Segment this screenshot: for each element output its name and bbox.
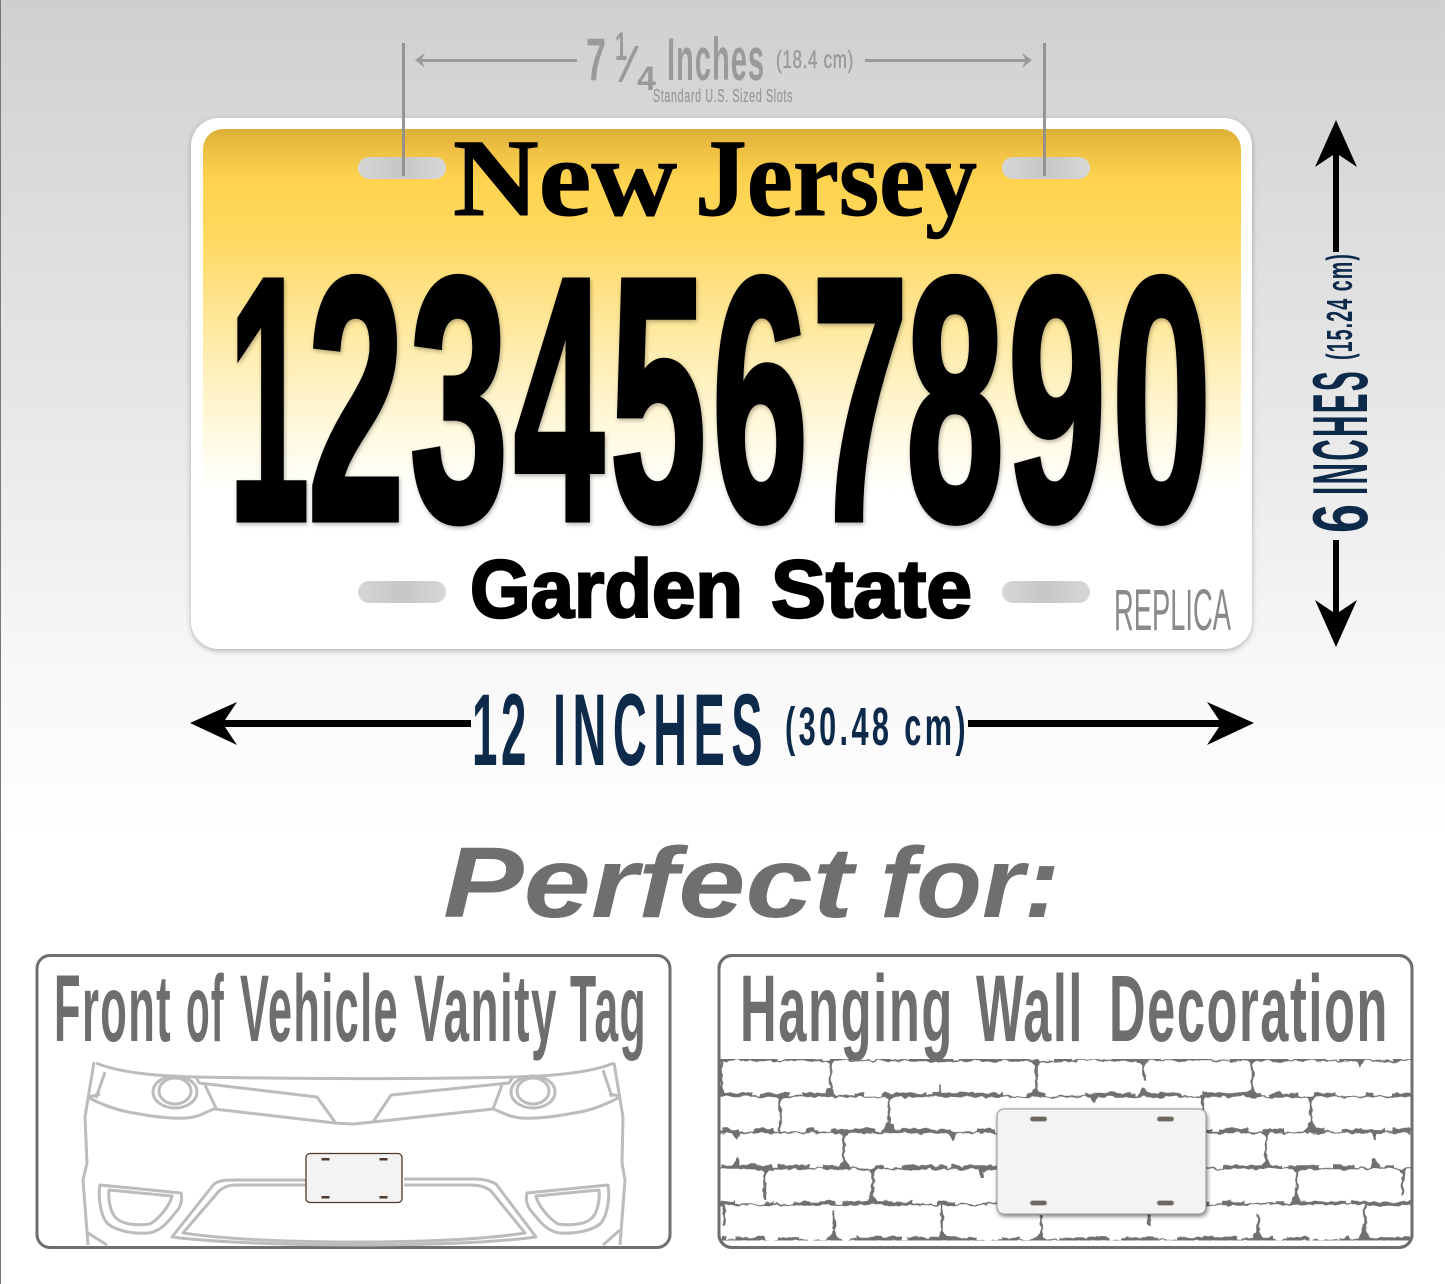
height label [1296,253,1384,533]
height label: (15.24 cm) [1319,253,1360,360]
brick wall [719,1059,1411,1240]
panel title: of [186,956,225,1062]
panel title: Hanging [740,956,954,1062]
plate yellow gradient field [203,129,1241,560]
spacing label: 7 [586,26,606,93]
height label: 6 [1296,504,1384,533]
plate number: 5 [610,207,706,593]
state name [453,117,977,239]
panel title [54,956,647,1062]
panel title: Vehicle [240,956,399,1062]
panel frame [37,956,670,1248]
panel: wall decoration [719,956,1412,1248]
spacing label: 4 [637,60,656,98]
right arrow [968,702,1254,745]
mortar thin lines [719,1060,1411,1240]
plate number: 2 [308,207,404,593]
license plate [191,117,1252,649]
plate number: 8 [906,207,1004,593]
panel title: Wall [976,956,1084,1062]
slogan: Garden [470,544,743,635]
width label: INCHES [553,673,769,787]
spacing label: 1 [615,25,627,69]
left arrow [190,702,471,745]
mounting slots [358,157,1090,603]
plate number: 3 [410,207,508,593]
width label: 12 [472,673,530,787]
panel: front of vehicle [37,956,670,1248]
panel frame edge [719,956,1412,1248]
height dimension [1296,120,1384,647]
panel title: Front [54,956,172,1062]
plate number [229,207,1211,593]
heading: perfect for: Perfect [443,827,857,939]
plate number: 4 [514,207,605,593]
car outline [83,1062,625,1245]
left arrow [415,53,577,68]
vertical arrow up [1315,120,1357,252]
heading: perfect for: for: [880,827,1060,939]
plate number: 7 [812,207,908,593]
panel: front of vehicle: Tag [570,956,647,1062]
slogan: State [771,544,972,635]
small blank plate [306,1154,402,1202]
plate number: 1 [229,207,309,593]
width label: (30.48 cm) [785,697,969,757]
slot spacing dimension [402,25,1046,176]
license plate: REPLICA [1114,578,1231,643]
plate number: 0 [1112,207,1211,593]
panel title: Vanity [414,956,558,1062]
spacing label [586,25,854,98]
plate number: 9 [1008,207,1106,593]
right arrow [865,53,1032,68]
spacing label: Inches [667,26,765,93]
vertical arrow down [1315,540,1357,647]
width dimension [190,673,1254,787]
height label: INCHES [1296,369,1384,495]
state name: Jersey [695,117,977,239]
plate white base [191,118,1252,649]
slot note: Standard U.S. Sized Slots [653,86,793,106]
slogan [470,544,972,635]
state name: New [453,117,677,239]
slot guide lines [402,43,1046,176]
plate number: 6 [712,207,808,593]
spacing label: (18.4 cm) [776,46,854,74]
panel title [740,956,1389,1062]
panel frame [719,956,1412,1248]
hanging blank plate [997,1109,1206,1214]
heading: perfect for [443,827,1060,939]
